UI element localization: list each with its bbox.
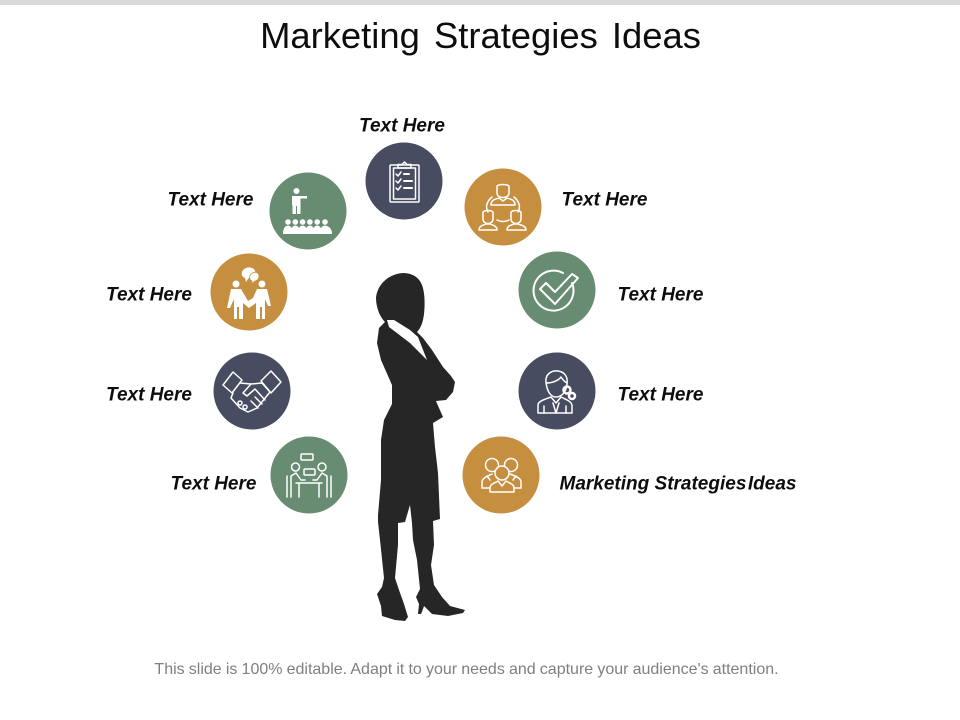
item: presenter and audience [270,172,346,250]
item: team network [464,168,542,246]
label: right upper: Text Here [618,284,704,306]
item: group of three people [462,436,540,514]
label: right lower: Text Here [618,384,704,406]
label: left upper: Text Here [106,284,192,306]
label: top: Text Here [359,116,445,136]
item: employee with gears [518,352,596,430]
label: bottom left: Text Here [171,474,257,494]
title: Marketing Strategies Ideas [260,15,701,56]
silhouette: businesswoman [376,273,465,621]
label: left lower: Text Here [106,384,192,406]
label: upper left: Text Here [168,190,254,210]
item: two people talking [210,254,288,330]
item: meeting at table [270,436,348,514]
item: check mark [518,252,596,328]
label: bottom right: Marketing StrategiesIdeas [560,474,796,494]
label: upper right: Text Here [562,190,648,210]
item: handshake [214,352,290,430]
item: clipboard checklist [366,142,442,220]
footer note: This slide is 100% editable. Adapt it to your needs and capture your audience's attention. [154,661,779,678]
